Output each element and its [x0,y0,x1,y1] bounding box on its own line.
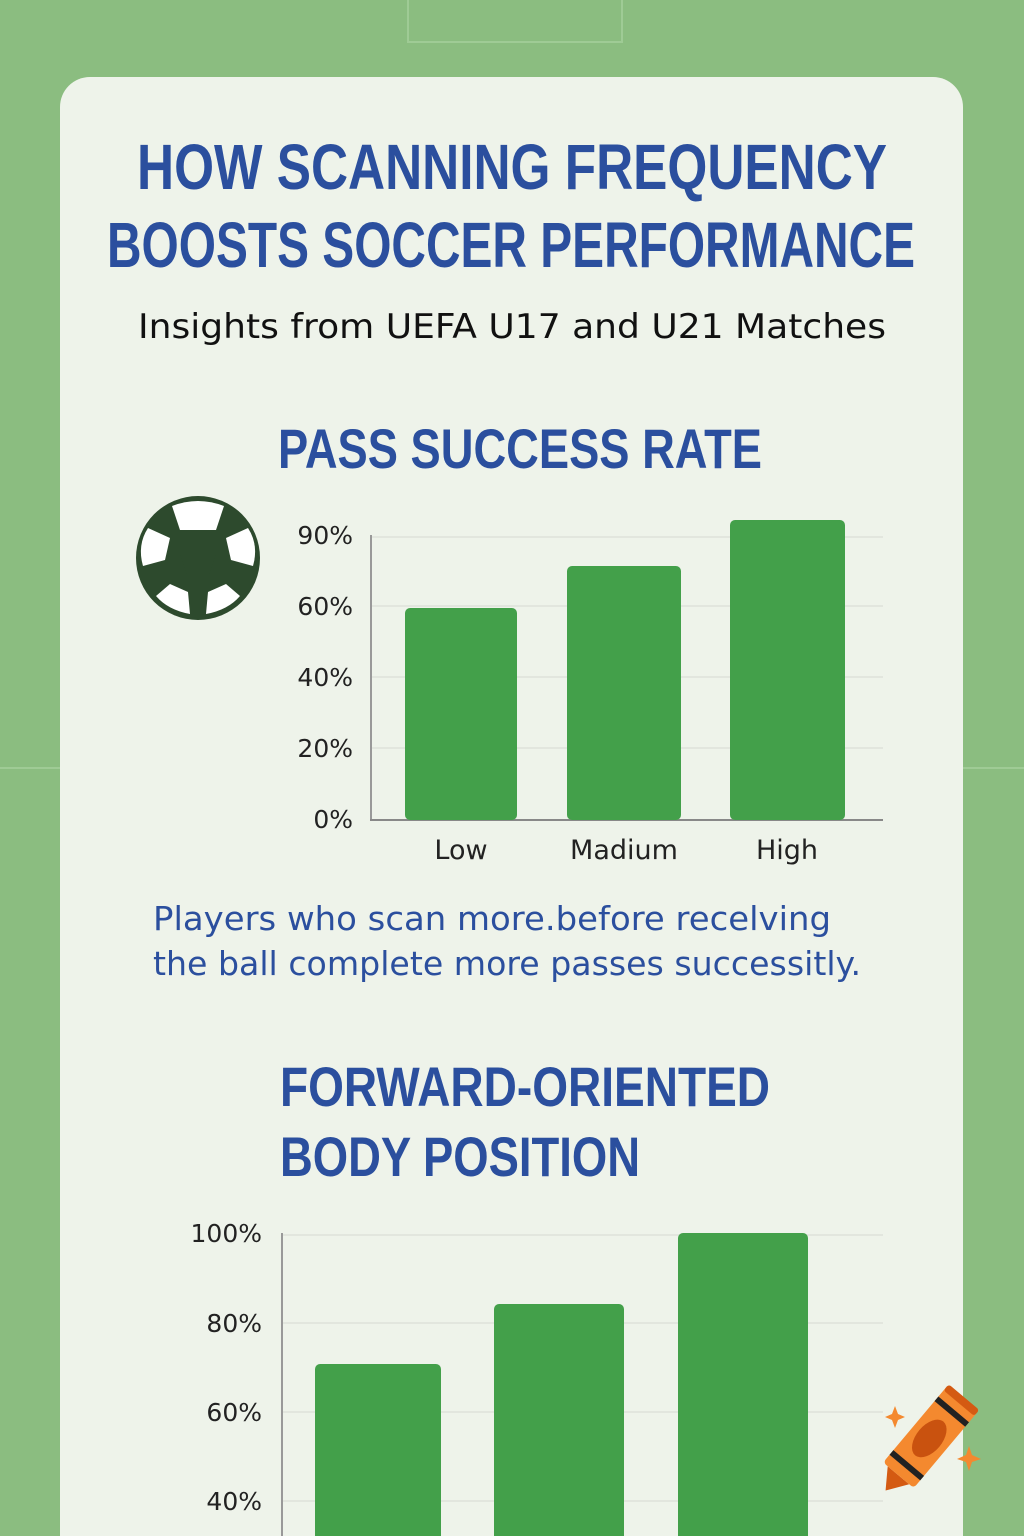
heading: forward-oriented body position [280,1055,770,1188]
caption [153,899,861,983]
caption: the ball complete more passes successitly. [153,944,861,983]
bar chart: forward-oriented body position: 100% [191,1219,262,1248]
bar chart: pass success rate: 20% [297,734,353,763]
subtitle: Insights from UEFA U17 and U21 Matches [138,307,886,347]
bar chart: pass success rate: 0% [313,805,353,834]
bar chart: pass success rate: Low [434,835,488,866]
bar chart: pass success rate: 40% [297,663,353,692]
heading: forward-oriented body position: FORWARD-ORIENTED [280,1055,770,1118]
icon: crayon [870,1384,979,1503]
icon: sparkles [885,1406,981,1471]
bar chart: pass success rate [297,520,883,866]
bar chart: pass success rate: High [756,835,818,866]
bar chart: forward-oriented body position: 40% [206,1487,262,1516]
bar chart: forward-oriented body position [191,1219,883,1536]
heading: forward-oriented body position: BODY POSITION [280,1125,640,1188]
caption: Players who scan more.before recelving [153,899,831,938]
bar chart: pass success rate: 60% [297,592,353,621]
title [107,131,915,281]
heading: pass success rate: PASS SUCCESS RATE [278,417,762,480]
bar chart: pass success rate: Madium [570,835,678,866]
bar chart: pass success rate: 90% [297,521,353,550]
icon: soccer ball [136,496,260,620]
bar chart: forward-oriented body position: 80% [206,1309,262,1338]
bar chart: forward-oriented body position: 60% [206,1398,262,1427]
